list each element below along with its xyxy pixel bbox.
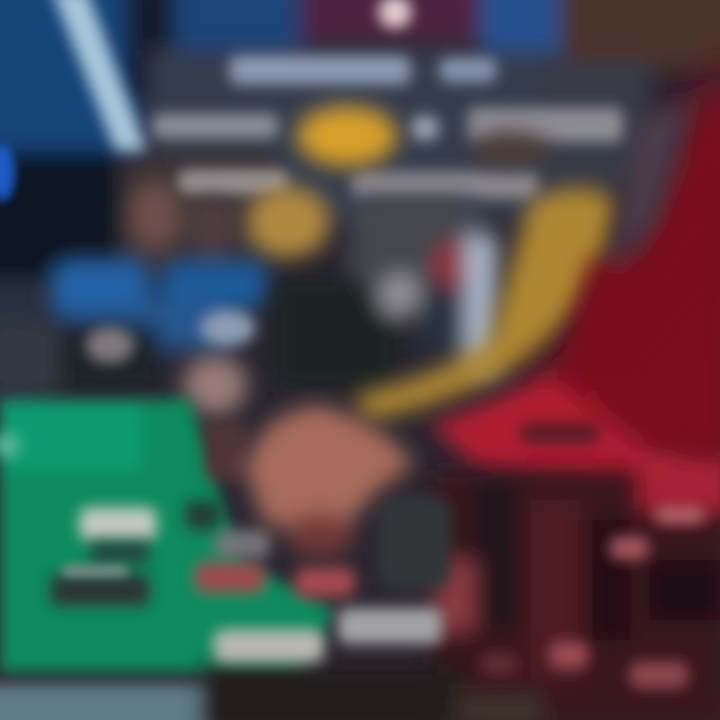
central dark figure xyxy=(270,132,550,390)
light streak xyxy=(52,0,146,150)
hand over table xyxy=(245,405,415,557)
golden glow logo xyxy=(246,106,397,258)
mustard sleeve xyxy=(355,188,615,420)
blue side glow xyxy=(0,144,14,200)
seated players in blue xyxy=(0,180,270,415)
left chip stacks xyxy=(50,420,355,606)
green poker table xyxy=(0,398,335,672)
background: arena wall and banners xyxy=(0,0,720,400)
blurred heading text rows xyxy=(152,56,623,198)
foreground white chips xyxy=(0,608,545,720)
top spotlight xyxy=(379,0,411,28)
red garment xyxy=(430,70,720,520)
foreground chip stacks on right xyxy=(378,422,720,720)
